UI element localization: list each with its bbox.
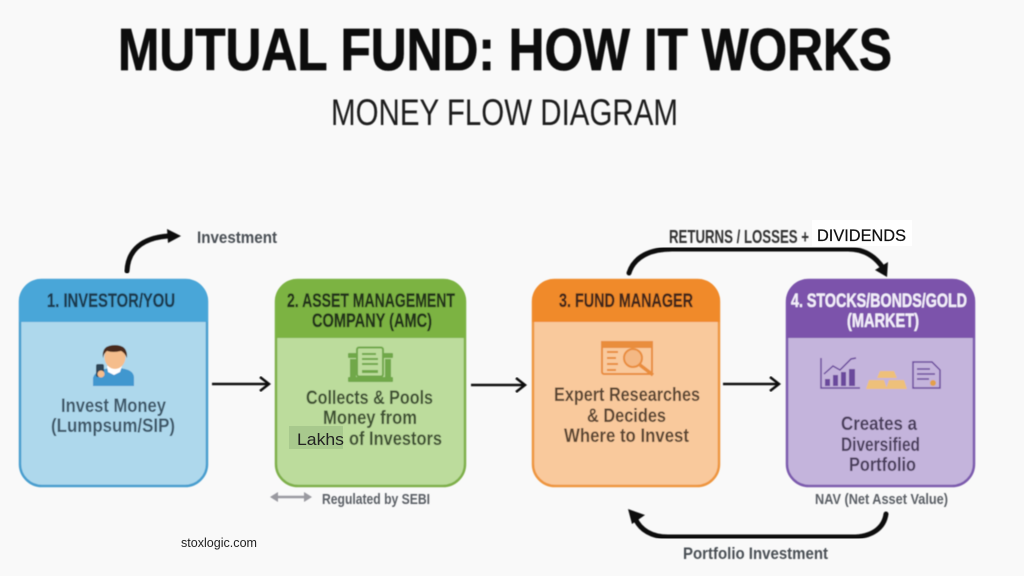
arrow: AMC to fund manager (471, 378, 525, 392)
highlight patch behind Lakhs (289, 426, 343, 449)
icon: gold bars (866, 371, 907, 389)
arrow: investment (127, 229, 181, 271)
text: expert researches: Expert Researches (554, 385, 700, 406)
label: NAV: NAV (Net Asset Value) (815, 491, 948, 508)
label: investment: Investment (197, 228, 277, 247)
heading: AMC line 1: 2. ASSET MANAGEMENT (287, 291, 455, 312)
label: portfolio investment: Portfolio Investment (683, 544, 828, 563)
heading: investor: 1. INVESTOR/YOU (47, 291, 175, 312)
panel header: investor (19, 279, 208, 322)
arrow: returns over the top (629, 249, 888, 277)
text: money from: Money from (323, 408, 417, 429)
text: portfolio: Portfolio (849, 455, 916, 476)
label: returns and losses: RETURNS / LOSSES + (669, 227, 809, 247)
icon: growth chart (821, 358, 860, 388)
heading: fund manager: 3. FUND MANAGER (559, 291, 693, 312)
panel: market (786, 279, 975, 486)
icon: research magnifier (602, 342, 653, 375)
arrow: regulated double arrow (270, 492, 312, 502)
title: MUTUAL FUND: HOW IT WORKS (118, 17, 892, 83)
text: lakhs: Lakhs (297, 430, 344, 449)
text: collects and pools: Collects & Pools (306, 388, 433, 409)
text: creates a: Creates a (841, 414, 917, 435)
panel: investor (19, 279, 208, 486)
text: of investors: of Investors (349, 429, 442, 450)
arrow: investor to AMC (212, 377, 269, 391)
panel body: AMC (276, 280, 465, 486)
panel body: market (787, 280, 974, 486)
text: lumpsum or SIP: (Lumpsum/SIP) (51, 416, 175, 437)
panel header: AMC (275, 279, 466, 338)
label: regulated by SEBI: Regulated by SEBI (322, 491, 430, 508)
panel: fund manager (532, 279, 720, 486)
text: where to invest: Where to Invest (564, 426, 690, 447)
panel body: fund manager (533, 280, 719, 486)
text: diversified: Diversified (841, 435, 920, 456)
heading: market line 1: 4. STOCKS/BONDS/GOLD (791, 291, 967, 312)
arrow: fund manager to market (723, 377, 779, 391)
text: and decides: & Decides (587, 406, 666, 427)
label: dividends: DIVIDENDS (817, 226, 906, 245)
icon: person with phone (93, 345, 134, 386)
heading: market line 2: (MARKET) (847, 311, 919, 332)
panel: asset management company (275, 279, 466, 486)
text: invest money: Invest Money (61, 396, 166, 417)
patch behind dividends (812, 220, 912, 246)
panel body: investor (20, 280, 207, 486)
arrow: portfolio investment return (628, 509, 886, 537)
subtitle: MONEY FLOW DIAGRAM (331, 92, 678, 133)
icon: bank building (348, 348, 393, 382)
heading: AMC line 2: COMPANY (AMC) (312, 311, 432, 332)
watermark: site name: stoxlogic.com (181, 535, 257, 550)
panel header: fund manager (532, 279, 720, 322)
panel header: market (786, 279, 975, 338)
icon: document (913, 362, 940, 388)
